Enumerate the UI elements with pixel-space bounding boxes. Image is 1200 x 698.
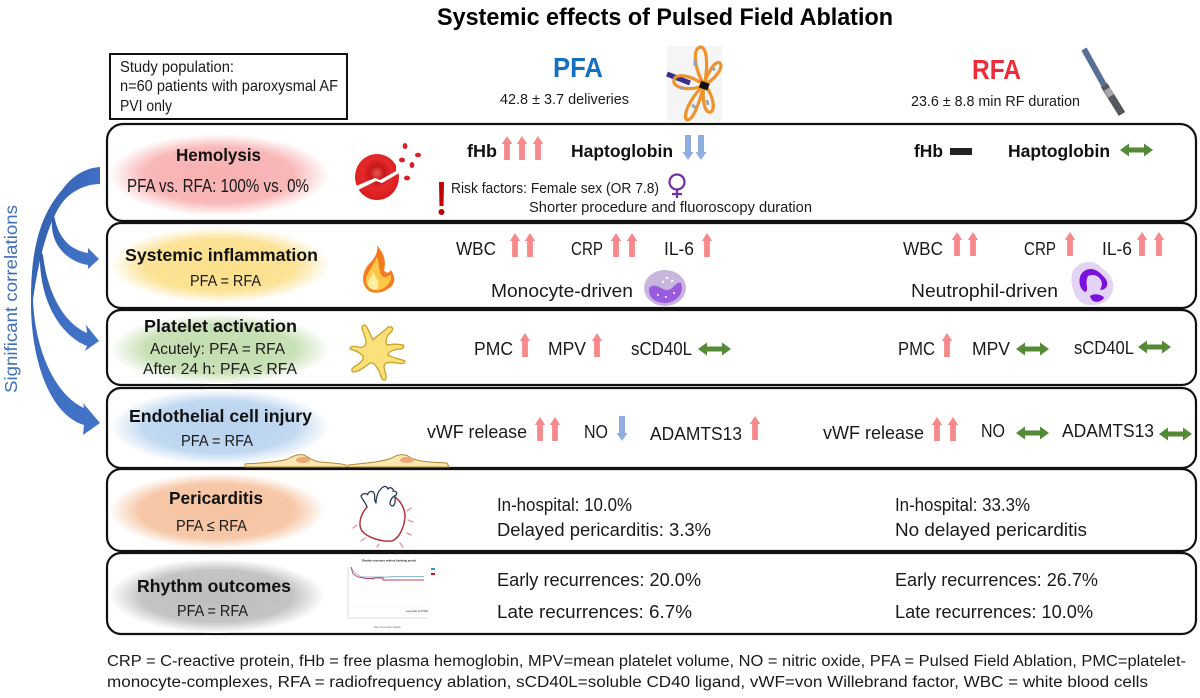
PFA fHb: fHb [467,141,497,161]
endothelial result: PFA = RFA [181,433,253,450]
endothelial heading: Endothelial cell injury [129,406,312,426]
PFA header [500,52,629,108]
panel: systemic inflammation [107,223,1196,308]
pericarditis result: PFA ≤ RFA [176,518,247,535]
platelet ellipse [110,314,330,384]
platelet results: Acutely: PFA = RFA [150,341,286,358]
platelet results [143,341,298,378]
RFA sCD40L: sCD40L [1074,338,1134,358]
RFA rhythm data [895,570,1098,622]
pericarditis heading: Pericarditis [169,488,263,508]
RFA NO: NO [981,421,1005,441]
study population box [110,54,347,119]
PFA CRP: CRP [571,239,603,259]
RFA vWF release [823,417,958,443]
icon: heart [353,486,413,547]
PFA WBC: WBC [456,239,496,259]
PFA header: PFA [553,52,603,83]
significant correlations label: Significant correlations [1,205,21,393]
PFA header: 42.8 ± 3.7 deliveries [500,92,629,108]
panel: pericarditis [107,469,1196,551]
risk factors [451,180,812,216]
inflammation result: PFA = RFA [190,273,261,290]
icon: activated platelet [350,325,405,380]
footnote: abbreviations [107,653,1186,691]
endothelial ellipse [110,389,330,465]
PFA PMC [474,333,530,359]
RFA NO [981,421,1049,441]
RFA header [911,54,1080,110]
icon: RFA catheter [1084,49,1122,114]
RFA IL-6: IL-6 [1102,239,1132,259]
RFA haptoglobin: Haptoglobin [1008,141,1110,161]
RFA PMC [898,333,952,359]
RFA header: 23.6 ± 8.8 min RF duration [911,94,1080,110]
PFA rhythm data: Late recurrences: 6.7% [497,602,692,622]
icon: exclamation mark [438,182,444,215]
chart: rhythm survival curves: Log-rank p=0.534 [406,609,429,613]
PFA ADAMTS13 [650,416,760,444]
PFA sCD40L: sCD40L [631,339,692,359]
RFA ADAMTS13: ADAMTS13 [1062,421,1154,441]
PFA vWF release: vWF release [427,422,527,442]
monocyte-driven: Monocyte-driven [491,281,633,301]
PFA rhythm data: Early recurrences: 20.0% [497,570,701,590]
icon: endothelial cells [245,455,449,467]
icon: PFA catheter [667,46,722,121]
RFA fHb: fHb [914,141,943,161]
PFA rhythm data [497,570,701,622]
icon: female symbol [670,174,684,198]
panel: hemolysis [107,124,1196,221]
chart: rhythm survival curves: Rhythm outcomes without blanking period [362,558,416,562]
PFA ADAMTS13: ADAMTS13 [650,424,742,444]
PFA NO [584,416,628,442]
RFA CRP: CRP [1024,239,1056,259]
chart: rhythm survival curves: Days since index ablation [374,625,402,629]
RFA WBC: WBC [903,239,943,259]
RFA WBC [903,232,978,259]
rhythm heading: Rhythm outcomes [137,576,291,596]
icon: neutrophil [1071,262,1113,305]
PFA pericarditis data: Delayed pericarditis: 3.3% [497,520,711,540]
study population box: PVI only [120,98,172,115]
panel: platelet activation [107,310,1196,385]
RFA MPV: MPV [972,339,1010,359]
PFA sCD40L [631,339,731,359]
risk factors: Shorter procedure and fluoroscopy duration [529,199,812,216]
hemolysis result: PFA vs. RFA: 100% vs. 0% [127,176,309,196]
panel: endothelial cell injury [107,388,1196,468]
rhythm ellipse [109,559,325,633]
PFA haptoglobin: Haptoglobin [571,141,673,161]
pericarditis ellipse [109,473,325,549]
footnote: abbreviations: monocyte-complexes, RFA = radiofrequency ablation, sCD40L=soluble CD40 ligand, vWF=von Willebrand factor, WBC = white blood cells [107,674,1148,691]
inflammation ellipse [110,227,330,303]
PFA IL-6 [664,233,712,259]
RFA fHb [914,141,972,161]
footnote: abbreviations: CRP = C-reactive protein, fHb = free plasma hemoglobin, MPV=mean platelet volume, NO = nitric oxide, PFA = Pulsed Field Ablation, PMC=platelet- [107,653,1186,670]
PFA fHb [467,136,543,161]
PFA PMC: PMC [474,339,513,359]
study population box: Study population: [120,59,234,76]
PFA haptoglobin [571,135,706,161]
PFA MPV: MPV [548,339,586,359]
neutrophil-driven: Neutrophil-driven [911,281,1058,301]
PFA vWF release [427,417,560,442]
PFA pericarditis data: In-hospital: 10.0% [497,495,632,515]
RFA pericarditis data: In-hospital: 33.3% [895,495,1030,515]
title: Systemic effects of Pulsed Field Ablation [437,4,893,31]
platelet heading: Platelet activation [144,316,297,336]
RFA vWF release: vWF release [823,423,924,443]
PFA CRP [571,233,637,259]
PFA WBC [456,233,535,259]
arrows: correlations [31,167,100,435]
rhythm result: PFA = RFA [177,603,248,620]
RFA PMC: PMC [898,339,935,359]
icon: flame [363,245,394,293]
PFA NO: NO [584,422,608,442]
PFA pericarditis data [497,495,711,540]
hemolysis ellipse [109,134,329,216]
RFA sCD40L [1074,338,1171,358]
icon: ruptured red blood cell [355,143,421,200]
inflammation heading: Systemic inflammation [125,245,318,265]
PFA IL-6: IL-6 [664,239,694,259]
PFA MPV [548,333,602,359]
RFA MPV [972,339,1049,359]
icon: monocyte [644,270,686,306]
study population box: n=60 patients with paroxysmal AF [120,78,338,95]
panel: rhythm outcomes [107,553,1196,634]
RFA rhythm data: Late recurrences: 10.0% [895,602,1093,622]
RFA pericarditis data [895,495,1087,540]
platelet results: After 24 h: PFA ≤ RFA [143,361,298,378]
hemolysis heading: Hemolysis [176,145,261,165]
RFA rhythm data: Early recurrences: 26.7% [895,570,1098,590]
RFA header: RFA [972,54,1021,85]
risk factors: Risk factors: Female sex (OR 7.8) [451,180,659,197]
RFA IL-6 [1102,232,1164,259]
RFA CRP [1024,232,1075,259]
RFA pericarditis data: No delayed pericarditis [895,520,1087,540]
chart: rhythm survival curves [348,558,435,629]
